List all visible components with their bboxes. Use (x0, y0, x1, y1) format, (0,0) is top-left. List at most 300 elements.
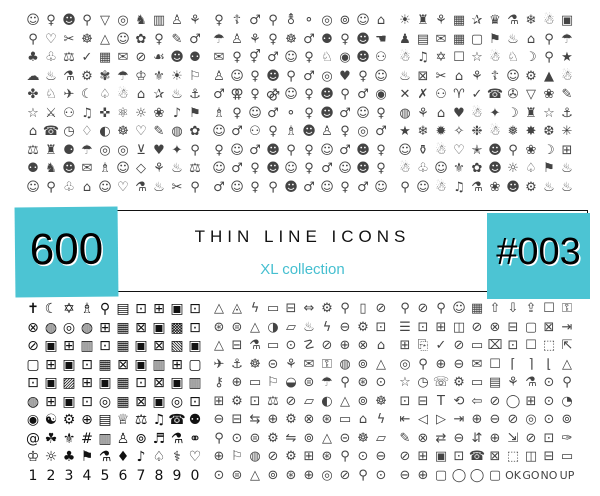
panel: top-middle icons (people): ♀ (304, 161, 314, 176)
panel: bottom-left icons (sports squares): ☎ (168, 412, 186, 428)
panel: top-left icons (baby): ☸ (81, 32, 93, 46)
panel: bottom-right icons (interface): ⚗ (525, 375, 537, 390)
panel: bottom-right icons (interface): ⊖ (400, 468, 410, 482)
panel: top-middle icons (people): ☺ (248, 106, 262, 120)
panel: bottom-left icons (sports squares): ⊡ (189, 301, 201, 317)
panel: bottom-right icons (interface): ☰ (399, 320, 411, 334)
panel: bottom-right icons (interface): ⊘ (490, 394, 500, 408)
panel: top-middle icons (people): ♀ (250, 161, 260, 176)
panel: bottom-middle icons (auto): ⚙ (267, 430, 279, 446)
panel: bottom-middle icons (auto): ☡ (303, 338, 315, 353)
panel: bottom-right icons (interface): ⊞ (418, 449, 428, 464)
panel: top-middle icons (people): ♀ (232, 106, 242, 120)
panel: bottom-left icons (sports squares): ▩ (170, 320, 184, 336)
panel: bottom-right icons (interface): ⊡ (454, 449, 464, 464)
panel: top-left icons (baby): ✂ (64, 32, 74, 46)
panel: top-left icons (baby): ☂ (117, 68, 129, 84)
panel: bottom-left icons (sports squares): ⊠ (153, 375, 165, 391)
panel: bottom-middle icons (auto): ◍ (339, 356, 351, 372)
panel: top-middle icons (people): ☚ (375, 32, 387, 46)
panel: top-middle icons (people): ☻ (320, 87, 334, 102)
panel: top-middle icons (people): ☻ (266, 161, 280, 176)
panel: top-middle icons (people): ♀ (250, 68, 260, 84)
panel: top-middle icons (people): ☻ (356, 50, 370, 65)
panel: bottom-middle icons (auto): ⚲ (358, 468, 368, 482)
panel: bottom-right icons (interface): ◷ (417, 375, 429, 390)
panel: top-right icons (holiday): ▣ (561, 13, 573, 28)
panel: top-left icons (baby): ⚇ (63, 106, 75, 120)
panel: top-left icons (baby): ☼ (135, 106, 147, 120)
panel: bottom-middle icons (auto): ϟ (251, 301, 259, 316)
panel: top-middle icons (people): ☺ (212, 161, 226, 176)
panel: top-left icons (baby): ♞ (135, 13, 147, 28)
panel: top-left icons (baby): ♀ (46, 13, 56, 28)
panel: top-middle icons (people): ⚢ (230, 87, 244, 102)
panel: bottom-left icons (sports squares): ▦ (116, 338, 130, 354)
panel: top-left icons (baby): ☻ (62, 161, 76, 176)
panel: bottom-left icons (sports squares): ▢ (188, 356, 202, 372)
panel: top-left icons (baby): ⚜ (153, 68, 165, 84)
panel: top-middle icons (people): ⚬ (286, 106, 296, 120)
panel: top-right icons (holiday): ❀ (526, 142, 536, 158)
panel: top-right icons (holiday): ◍ (399, 106, 411, 120)
panel: bottom-right icons (interface): ⚿ (562, 301, 572, 316)
panel: bottom-middle icons (auto): ▭ (339, 412, 351, 427)
panel: top-middle icons (people): ◉ (339, 50, 351, 65)
panel: bottom-left icons (sports squares): ⚲ (100, 301, 110, 317)
panel: top-left icons (baby): ♪ (173, 106, 181, 120)
panel: top-middle icons (people): ♂ (339, 142, 351, 158)
panel: top-left icons (baby): ♨ (45, 68, 57, 84)
panel: bottom-left icons (sports squares): ▦ (116, 320, 130, 336)
panel: bottom-middle icons (auto): ⚖ (267, 394, 279, 408)
panel: top-middle icons (people): ♂ (303, 32, 315, 46)
panel: top-middle icons (people): ♀ (340, 32, 350, 46)
panel: bottom-left icons (sports squares): ♙ (117, 430, 129, 446)
panel: top-middle icons (people): ♙ (231, 32, 243, 46)
panel: top-right icons (holiday): ⚙ (525, 68, 537, 84)
panel: bottom-middle icons (auto): ⊛ (322, 412, 332, 427)
panel: bottom-middle icons (auto): ⚙ (231, 394, 243, 408)
panel: bottom-middle icons (auto): ⚐ (267, 375, 279, 390)
panel: bottom-left icons (sports squares): ▦ (98, 356, 112, 372)
panel: bottom-left icons (sports squares): ⚭ (189, 430, 201, 446)
panel: top-left icons (baby): ✎ (154, 124, 164, 139)
panel: top-right icons (holiday): ✉ (436, 32, 446, 46)
panel: top-middle icons (people): ◉ (375, 87, 387, 102)
panel: bottom-right icons (interface): ✉ (472, 356, 482, 372)
panel: top-middle icons (people): ☺ (230, 180, 244, 194)
panel: top-right icons (holiday): ⚲ (508, 142, 518, 158)
panel: bottom-right icons (interface): ◁ (418, 412, 428, 427)
panel: top-right icons (holiday): ☽ (507, 106, 519, 120)
panel: bottom-middle icons (auto): ⊛ (214, 320, 224, 334)
panel: bottom-middle icons (auto): ⚘ (285, 356, 297, 372)
panel: top-right icons (holiday): ☺ (398, 142, 412, 158)
panel: top-middle icons (people): ♂ (231, 161, 243, 176)
panel: top-middle icons (people): ⚘ (249, 32, 261, 46)
panel: bottom-right icons (interface): ⊕ (472, 412, 482, 427)
panel: bottom-middle icons (auto): ⚙ (357, 320, 369, 334)
panel: bottom-left icons (sports squares): ⊗ (27, 320, 39, 336)
panel: bottom-middle icons (auto): ⊞ (214, 394, 224, 408)
panel: top-right icons (holiday): ⚑ (543, 161, 555, 176)
panel: top-middle icons (people): ◎ (321, 13, 333, 28)
panel: top-left icons (baby): ⌂ (137, 87, 145, 102)
panel: top-right icons (holiday): ☻ (506, 180, 520, 194)
panel: bottom-left icons (sports squares): ▤ (98, 412, 112, 428)
panel: bottom-middle icons (auto): ⊟ (286, 301, 296, 316)
panel: bottom-right icons (interface): ◫ (453, 320, 465, 334)
panel: top-left icons (baby): ⌂ (29, 124, 37, 139)
panel: top-right icons (holiday): ⚲ (544, 32, 554, 46)
panel: bottom-right icons (interface): ⇵ (472, 430, 482, 446)
panel: bottom-right icons (interface): ▢ (525, 320, 537, 334)
panel: bottom-right icons (interface): ☏ (433, 375, 449, 390)
panel: top-middle icons (people): ⚲ (268, 13, 278, 28)
panel: top-right icons (holiday): ♟ (399, 32, 411, 46)
panel: bottom-right icons (interface): ⊙ (544, 375, 554, 390)
panel: bottom-right icons (interface): ✑ (562, 430, 572, 446)
panel: top-middle icons (people): ☻ (284, 180, 298, 194)
panel: bottom-right icons (interface): ✓ (436, 338, 446, 353)
panel: bottom-middle icons (auto): ⊜ (304, 375, 314, 390)
panel: bottom-left icons (sports squares): ▣ (134, 338, 148, 354)
panel: bottom-middle icons (auto): ⊜ (250, 430, 260, 446)
panel: top-middle icons (people): ☦ (233, 13, 241, 28)
panel: top-right icons (holiday): ☃ (543, 13, 555, 28)
panel: bottom-middle icons (auto): ⊙ (286, 338, 296, 353)
panel: bottom-right icons (interface): ⊘ (508, 412, 518, 427)
panel: top-left icons (baby): ⚘ (189, 13, 201, 28)
panel: top-left icons (baby): ♀ (154, 32, 164, 46)
panel: top-middle icons (people): ♀ (214, 13, 224, 28)
panel: top-middle icons (people): ☺ (284, 87, 298, 102)
panel: top-right icons (holiday): ♨ (507, 32, 519, 46)
panel: bottom-left icons (sports squares): ▣ (62, 394, 76, 410)
panel: bottom-right icons (interface): OK (505, 468, 521, 482)
panel: bottom-left icons (sports squares): 3 (65, 468, 73, 484)
panel: top-right icons (holiday): ✰ (472, 13, 482, 28)
panel: top-middle icons (people): ♙ (321, 124, 333, 139)
panel: bottom-right icons (interface): ⊞ (400, 338, 410, 353)
panel: top-left icons (baby): ♫ (81, 106, 93, 120)
panel: bottom-right icons (interface): ⊕ (418, 468, 428, 482)
panel: top-middle icons (people): ☻ (302, 124, 316, 139)
panel: top-middle icons (people): ♂ (267, 106, 279, 120)
panel: bottom-left icons (sports squares): 8 (155, 468, 163, 484)
panel: bottom-left icons (sports squares): ▣ (44, 375, 58, 391)
panel: bottom-middle icons (auto): ⚲ (214, 430, 224, 446)
panel: bottom-left icons (sports squares): ⊡ (135, 301, 147, 317)
panel: top-middle icons (people): ☺ (338, 161, 352, 176)
panel: top-middle icons (people): ♘ (321, 50, 333, 65)
panel: bottom-middle icons (auto): △ (340, 394, 350, 408)
panel: bottom-right icons (interface): ⎘ (418, 338, 428, 353)
panel: bottom-left icons (sports squares): ◍ (27, 394, 39, 410)
panel: bottom-right icons (interface): UP (560, 468, 574, 482)
panel: bottom-middle icons (auto): ⌂ (377, 338, 385, 353)
panel: bottom-right icons (interface): ⊡ (400, 394, 410, 408)
panel: bottom-right icons (interface): △ (562, 356, 572, 372)
panel: top-right icons (holiday): ⌂ (455, 68, 463, 84)
panel: top-middle icons (people): ♥ (339, 68, 351, 84)
panel: top-left icons (baby): ◎ (117, 13, 129, 28)
panel: top-left icons (baby): ⚲ (190, 142, 200, 158)
panel: top-middle icons (people) (212, 12, 388, 194)
panel: bottom-left icons (sports squares): ◎ (171, 394, 183, 410)
panel: top-right icons (holiday): ⚘ (435, 13, 447, 28)
panel: bottom-left icons (sports squares): ⊕ (81, 412, 93, 428)
panel: bottom-middle icons (auto): ◎ (321, 468, 333, 482)
panel: bottom-right icons (interface): ◯ (470, 468, 484, 482)
panel: top-right icons (holiday): ⌂ (437, 106, 445, 120)
panel: top-left icons (baby): ◎ (117, 142, 129, 158)
panel: bottom-left icons (sports squares): ⚗ (99, 449, 111, 465)
panel: top-right icons (holiday): ♜ (417, 13, 429, 28)
panel: top-middle icons (people): ♀ (340, 124, 350, 139)
panel: top-middle icons (people): ☺ (320, 180, 334, 194)
panel: bottom-middle icons (auto): △ (322, 430, 332, 446)
panel: top-middle icons (people): ♂ (213, 87, 225, 102)
panel: bottom-right icons (interface): ⊘ (472, 320, 482, 334)
panel: top-right icons (holiday): ⚘ (417, 106, 429, 120)
panel: bottom-middle icons (auto): ⌂ (359, 412, 367, 427)
panel: top-left icons (baby): ✉ (118, 50, 128, 65)
panel: top-right icons (holiday): ☦ (491, 68, 499, 84)
panel: bottom-left icons (sports squares): ▣ (170, 375, 184, 391)
panel: top-right icons (holiday): ☎ (487, 87, 503, 102)
panel: top-left icons (baby): ♤ (99, 87, 111, 102)
panel: bottom-left icons (sports squares): ▤ (116, 301, 130, 317)
panel: top-middle icons (people): ♀ (376, 106, 386, 120)
panel: bottom-right icons (interface): GO (522, 468, 540, 482)
panel: bottom-left icons (sports squares): @ (26, 430, 40, 446)
panel: bottom-left icons (sports squares): ▣ (44, 338, 58, 354)
panel: top-left icons (baby): ✜ (100, 106, 110, 120)
panel: bottom-middle icons (auto): ▭ (267, 301, 279, 316)
panel: top-right icons (holiday): ⚜ (453, 161, 465, 176)
banner: left teal box with 600 (15, 206, 118, 298)
panel: bottom-middle icons (auto): ⊗ (304, 412, 314, 427)
panel: bottom-right icons (interface): ⟲ (454, 394, 464, 408)
panel: top-middle icons (people): ⚲ (340, 87, 350, 102)
panel: bottom-right icons (interface): ⇩ (508, 301, 518, 316)
panel: top-right icons (holiday): ✦ (490, 106, 500, 120)
panel: bottom-left icons (sports squares): ⊡ (99, 338, 111, 354)
panel: bottom-middle icons (auto): ⇔ (304, 301, 314, 316)
panel: top-middle icons (people): ⚥ (249, 50, 261, 65)
panel: top-right icons (holiday): ✓ (472, 87, 482, 102)
panel: bottom-left icons (sports squares): ☾ (45, 301, 57, 317)
panel: top-left icons (baby): ☁ (26, 68, 40, 84)
panel: bottom-left icons (sports squares): ⊡ (81, 394, 93, 410)
panel: bottom-right icons (interface): ◎ (525, 412, 537, 427)
panel: bottom-right icons (interface): ⊟ (544, 449, 554, 464)
banner: right teal box with #003: #003 (496, 231, 581, 273)
panel: top-right icons (holiday): ☺ (506, 68, 520, 84)
panel: bottom-left icons (sports squares): ▥ (80, 338, 94, 354)
panel: bottom-left icons (sports squares): ▦ (116, 375, 130, 391)
panel: top-middle icons (people): ♀ (268, 124, 278, 139)
panel: bottom-middle icons (auto): ⊡ (376, 320, 386, 334)
panel: top-left icons (baby): ❀ (154, 106, 164, 120)
panel: top-right icons (holiday): ⚙ (525, 180, 537, 194)
panel: bottom-middle icons (auto): ⊕ (214, 449, 224, 464)
panel: top-left icons (baby): ♡ (117, 180, 129, 194)
banner: right teal box with #003 (487, 213, 590, 299)
panel: bottom-middle icons (auto): ⊙ (214, 468, 224, 482)
panel: top-right icons (holiday): ❀ (544, 87, 554, 102)
panel: top-middle icons (people): ♀ (304, 142, 314, 158)
panel: bottom-middle icons (auto): △ (250, 468, 260, 482)
panel: top-middle icons (people): ♙ (213, 68, 225, 84)
panel: bottom-middle icons (auto): ⊖ (214, 412, 224, 427)
panel: top-left icons (baby): ◇ (136, 161, 146, 176)
panel: top-left icons (baby): ♣ (27, 50, 39, 65)
panel: top-left icons (baby): ☎ (43, 124, 59, 139)
panel: bottom-middle icons (auto): ⊙ (232, 430, 242, 446)
panel: top-right icons (holiday): ✳ (562, 124, 572, 139)
panel: bottom-middle icons (auto): ⊘ (376, 301, 386, 316)
panel: bottom-left icons (sports squares): ⊠ (153, 338, 165, 354)
panel: top-left icons (baby): ⚙ (81, 68, 93, 84)
panel: top-right icons (holiday): ✿ (472, 161, 482, 176)
panel: bottom-right icons (interface): ⇄ (436, 430, 446, 446)
panel: bottom-middle icons (auto): ♨ (303, 320, 315, 334)
panel: bottom-right icons (interface): ▢ (435, 468, 447, 482)
panel: bottom-right icons (interface): ⌉ (528, 356, 534, 372)
panel: bottom-left icons (sports squares): ⊠ (135, 320, 147, 336)
panel: top-left icons (baby): ✎ (172, 32, 182, 46)
panel: top-middle icons (people): ⚉ (321, 32, 333, 46)
panel: top-left icons (baby): ♢ (81, 124, 93, 139)
panel: bottom-right icons (interface): ⊕ (436, 356, 446, 372)
panel: bottom-middle icons (auto): ⚲ (340, 449, 350, 464)
panel: bottom-right icons (interface): ⊠ (544, 320, 554, 334)
panel: bottom-right icons (interface): ☆ (399, 375, 411, 390)
panel: bottom-middle icons (auto): ⚗ (249, 338, 261, 353)
panel: bottom-left icons (sports squares): ▨ (62, 375, 76, 391)
panel: bottom-left icons (sports squares): ⊞ (171, 356, 183, 372)
panel: top-right icons (holiday): ⚲ (544, 50, 554, 65)
panel: top-middle icons (people): ♗ (285, 124, 297, 139)
panel: bottom-middle icons (auto): △ (214, 301, 224, 316)
panel: top-middle icons (people): ⚬ (304, 13, 314, 28)
panel: bottom-right icons (interface): ⊙ (544, 394, 554, 408)
panel: top-right icons (holiday): ☼ (507, 161, 519, 176)
panel: bottom-middle icons (auto): ⚐ (231, 449, 243, 464)
panel: top-middle icons (people): ♀ (214, 142, 224, 158)
panel: top-right icons (holiday): ⚓ (561, 106, 573, 120)
panel: bottom-right icons (interface): ◫ (525, 449, 537, 464)
panel: bottom-right icons (interface): ⌊ (546, 356, 552, 372)
panel: bottom-right icons (interface): ☐ (525, 338, 537, 353)
panel: bottom-middle icons (auto): ⊕ (340, 338, 350, 353)
panel: top-middle icons (people): ♂ (339, 106, 351, 120)
panel: bottom-right icons (interface): ⊘ (400, 449, 410, 464)
panel: bottom-left icons (sports squares): ☼ (45, 449, 57, 465)
panel: top-right icons (holiday): ✗ (418, 87, 428, 102)
panel: top-right icons (holiday): ★ (561, 50, 573, 65)
panel: top-right icons (holiday): ♡ (453, 142, 465, 158)
panel: bottom-left icons (sports squares): ⊠ (117, 356, 129, 372)
panel: bottom-middle icons (auto): ⊞ (304, 449, 314, 464)
panel: top-middle icons (people): ♀ (232, 50, 242, 65)
panel: bottom-left icons (sports squares): ▣ (170, 301, 184, 317)
panel: top-right icons (holiday): ✕ (400, 87, 410, 102)
panel: bottom-middle icons (auto): ⚓ (231, 356, 243, 372)
panel: top-right icons (holiday): ▦ (453, 32, 465, 46)
panel: bottom-right icons (interface): ☎ (469, 449, 485, 464)
panel: bottom-right icons (interface): ▭ (471, 338, 483, 353)
panel: bottom-right icons (interface): ⊗ (490, 320, 500, 334)
panel: top-left icons (baby): ♥ (153, 142, 165, 158)
panel: bottom-left icons (sports squares): ▣ (62, 356, 76, 372)
panel: top-left icons (baby): ⚐ (189, 68, 201, 84)
panel: bottom-middle icons (auto): ⚙ (285, 412, 297, 427)
panel: bottom-right icons (interface): ⊖ (454, 356, 464, 372)
panel: bottom-left icons (sports squares): ▣ (134, 356, 148, 372)
panel: top-left icons (baby): ♔ (135, 68, 147, 84)
panel: top-middle icons (people): ♀ (304, 87, 314, 102)
panel: top-right icons (holiday): ❄ (418, 124, 428, 139)
panel: top-right icons (holiday): ☺ (434, 161, 448, 176)
panel: bottom-middle icons (auto): ⊝ (268, 356, 278, 372)
panel: top-right icons (holiday): ⚇ (435, 87, 447, 102)
panel: top-right icons (holiday): ♫ (417, 50, 429, 65)
panel: top-right icons (holiday): ▦ (453, 13, 465, 28)
panel: bottom-middle icons (auto): ⇆ (250, 412, 260, 427)
panel: top-right icons (holiday): ⚗ (471, 180, 483, 194)
panel: bottom-left icons (sports squares): ⊡ (135, 375, 147, 391)
panel: top-right icons (holiday): ✡ (436, 50, 446, 65)
panel: bottom-middle icons (auto): ⊖ (376, 449, 386, 464)
panel: top-left icons (baby): ◷ (63, 124, 75, 139)
panel: bottom-right icons (interface): ⇥ (562, 320, 572, 334)
panel: bottom-left icons (sports squares): ⊡ (189, 320, 201, 336)
panel: bottom-middle icons (auto): ⊕ (304, 468, 314, 482)
panel: bottom-right icons (interface): ⊘ (454, 338, 464, 353)
panel: top-middle icons (people): ♗ (213, 106, 225, 120)
panel: top-middle icons (people): ♂ (303, 180, 315, 194)
panel: top-left icons (baby): ◐ (99, 124, 111, 139)
panel: top-left icons (baby): ☻ (62, 13, 76, 28)
panel: top-right icons (holiday): ☃ (489, 50, 501, 65)
panel: bottom-middle icons (auto): ◑ (267, 320, 279, 334)
panel: bottom-right icons (interface): ⚲ (562, 375, 572, 390)
panel: bottom-left icons (sports squares): ▣ (152, 320, 166, 336)
panel: top-right icons (holiday): ♤ (525, 161, 537, 176)
panel: bottom-right icons (interface) (399, 301, 574, 482)
panel: bottom-middle icons (auto): ⊘ (286, 394, 296, 408)
panel: bottom-left icons (sports squares): ▢ (26, 356, 40, 372)
panel: top-right icons (holiday): ☃ (489, 124, 501, 139)
panel: top-middle icons (people): ⚇ (375, 50, 387, 65)
panel: bottom-right icons (interface): ⊡ (544, 430, 554, 446)
panel: bottom-right icons (interface): ✎ (400, 430, 410, 446)
panel: bottom-right icons (interface): ⬚ (543, 338, 555, 353)
panel: top-right icons (holiday): ▽ (526, 87, 536, 102)
panel: top-left icons (baby): ☙ (153, 50, 165, 65)
panel: bottom-middle icons (auto): ▱ (304, 394, 314, 408)
panel: top-middle icons (people): ◎ (321, 68, 333, 84)
panel: bottom-right icons (interface): ⊡ (508, 338, 518, 353)
panel: top-right icons (holiday): ⌂ (527, 32, 535, 46)
panel: top-middle icons (people): ♂ (231, 124, 243, 139)
panel: bottom-middle icons (auto): ☸ (357, 430, 369, 446)
panel: bottom-left icons (sports squares): ◎ (63, 320, 75, 336)
